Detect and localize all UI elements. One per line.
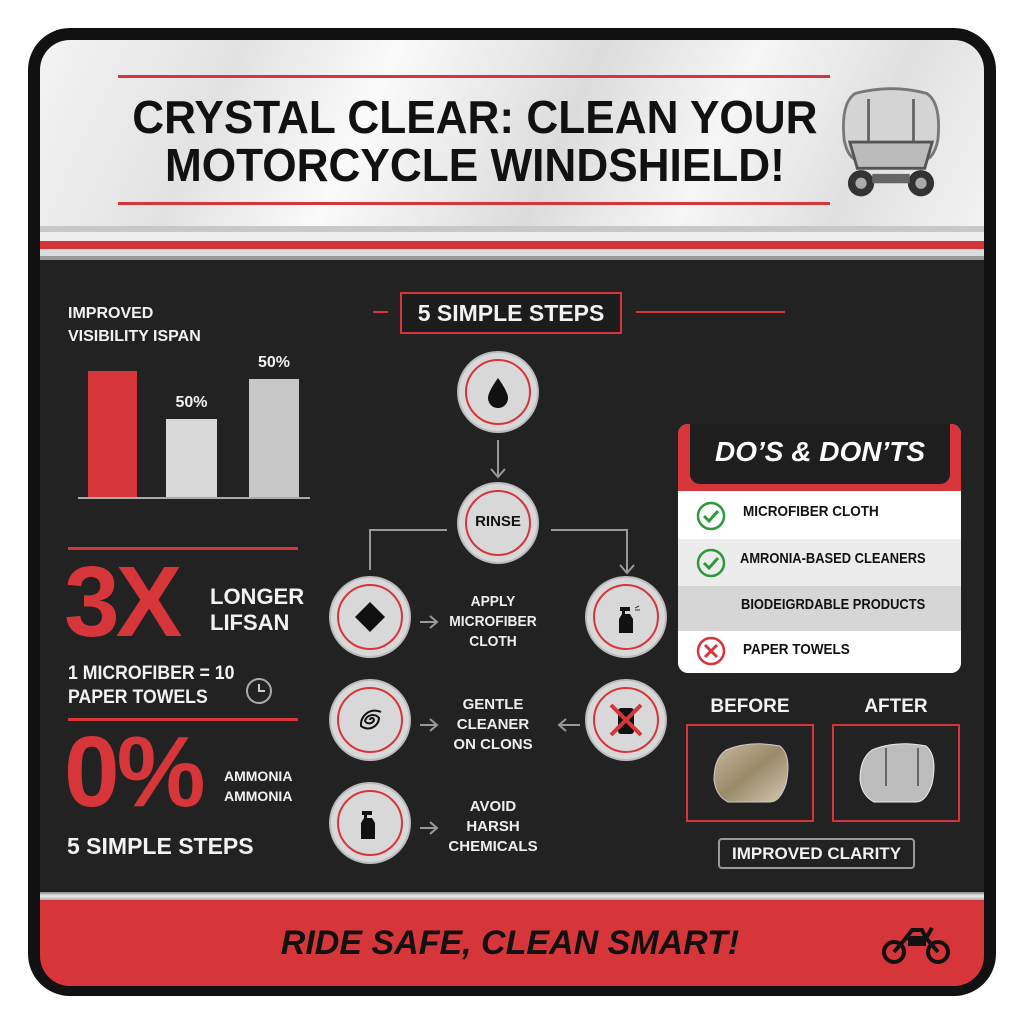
title [132, 91, 818, 191]
bar chart: 50% [258, 354, 290, 371]
stat: 0% [64, 716, 292, 828]
text: apply microfiber cloth: MICROFIBER [449, 613, 537, 630]
step: water drop [459, 353, 537, 431]
footer band [40, 892, 984, 900]
text: gentle cleaner [453, 696, 533, 753]
step: spray bottle [587, 578, 665, 656]
before/after [686, 696, 960, 822]
bar chart: IMPROVED [68, 305, 153, 322]
panel: do's and don'ts [678, 424, 961, 673]
panel: do's and don'ts: BIODEIGRDABLE PRODUCTS [741, 596, 925, 613]
text: gentle cleaner: GENTLE [463, 696, 523, 713]
text: avoid harsh chemicals [448, 798, 538, 855]
stat: 0%: AMMONIA [224, 768, 292, 784]
panel: do's and don'ts: MICROFIBER CLOTH [743, 503, 879, 520]
items [696, 502, 726, 530]
title: CRYSTAL CLEAR: CLEAN YOUR [132, 91, 818, 143]
icon: clock [246, 678, 272, 704]
panel: do's and don'ts: AMRONIA-BASED CLEANERS [740, 550, 926, 567]
footer text: RIDE SAFE, CLEAN SMART! [281, 924, 739, 962]
text: gentle cleaner: CLEANER [457, 716, 529, 733]
icon: windshield [842, 87, 940, 196]
header panel [40, 40, 984, 230]
step: swirl [331, 681, 409, 759]
dark body [40, 268, 984, 894]
stat: 3X: LIFSAN [210, 610, 289, 635]
stat: microfiber: 1 MICROFIBER = 10 [68, 663, 234, 684]
title: MOTORCYCLE WINDSHIELD! [165, 139, 785, 191]
stat: 0%: AMMONIA [224, 788, 292, 804]
heading: DO’S & DON’TS [715, 436, 925, 467]
before/after: BEFORE [710, 696, 790, 717]
step: cloth [331, 578, 409, 656]
stat: microfiber: PAPER TOWELS [68, 687, 208, 708]
bar chart: VISIBILITY ISPAN [68, 328, 201, 345]
text: apply microfiber cloth: APPLY [471, 593, 515, 610]
bar chart: 50% [175, 394, 208, 411]
heading [678, 424, 961, 491]
text: apply microfiber cloth: CLOTH [469, 633, 517, 650]
stat: 3X: LONGER [210, 584, 304, 609]
stat: 3X: 3X [64, 546, 178, 658]
step: rinse: RINSE [475, 513, 521, 530]
stat: 3X [64, 546, 304, 658]
stat: 0%: 0% [64, 716, 203, 828]
step: spray bottle 2 [331, 784, 409, 862]
text: gentle cleaner: ON CLONS [453, 736, 533, 753]
label: improved clarity [718, 838, 915, 869]
label: improved clarity: IMPROVED CLARITY [732, 844, 901, 863]
flowchart lines/arrows [369, 440, 635, 835]
bar chart [68, 305, 310, 499]
icon: motorcycle [882, 927, 950, 964]
text: avoid harsh chemicals: HARSH [466, 818, 520, 835]
text: avoid harsh chemicals: AVOID [470, 798, 516, 815]
steps heading: 5 SIMPLE STEPS [418, 300, 604, 326]
step: rinse [459, 484, 537, 562]
panel: do's and don'ts: PAPER TOWELS [743, 641, 850, 658]
stat: microfiber [68, 663, 234, 708]
before/after: AFTER [864, 696, 928, 717]
text: avoid harsh chemicals: CHEMICALS [448, 838, 538, 855]
stripes [40, 226, 984, 268]
text: apply microfiber cloth [449, 593, 537, 650]
text: 5 simple steps: 5 SIMPLE STEPS [67, 833, 254, 859]
step: no chemicals [587, 681, 665, 759]
